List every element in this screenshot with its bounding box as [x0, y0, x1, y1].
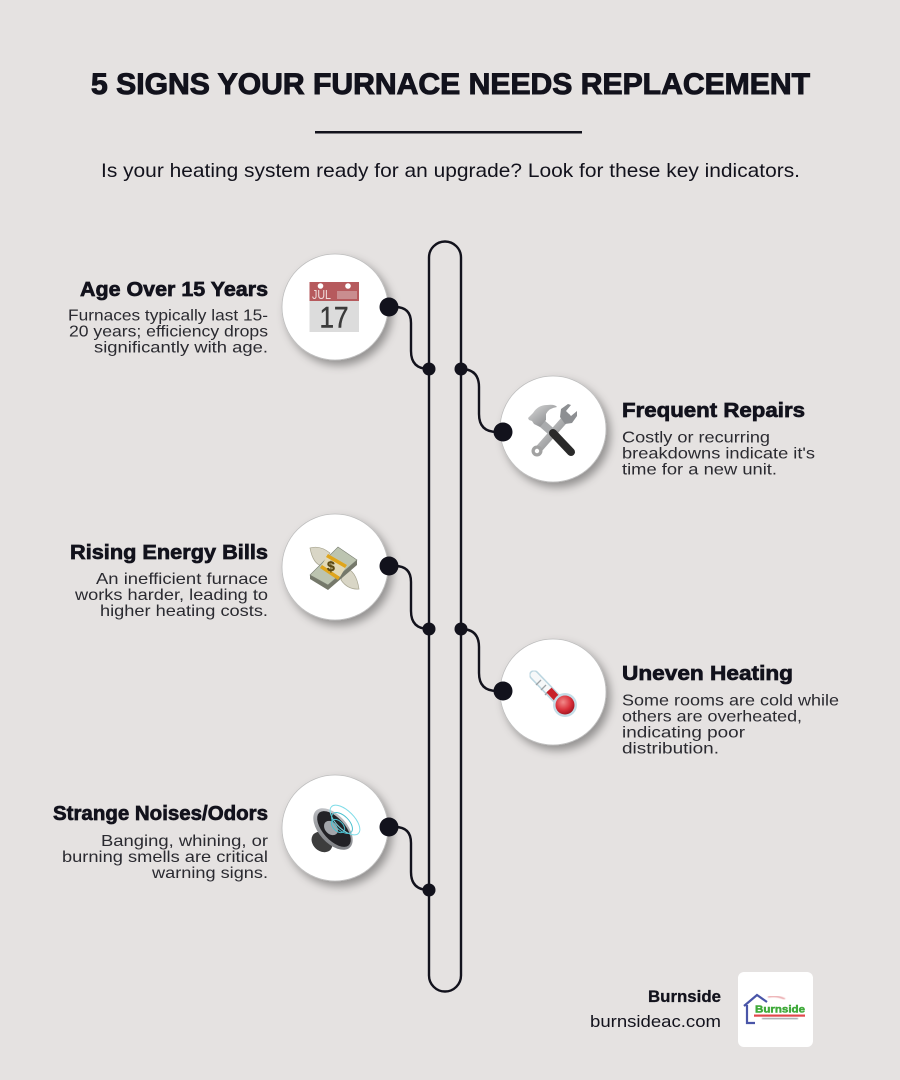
connector dot: noises: [380, 818, 398, 836]
central timeline tube: [429, 242, 461, 992]
heading: bills: Rising Energy Bills: [70, 541, 268, 564]
body: heating: others are overheated,: [622, 708, 802, 726]
icon circle: age: [282, 254, 388, 360]
body: repairs: Costly or recurring: [622, 430, 770, 446]
item: frequent repairs: [494, 376, 815, 482]
icon circle: repairs: [500, 376, 606, 482]
title: 5 SIGNS YOUR FURNACE NEEDS REPLACEMENT: [91, 68, 810, 101]
subtitle: Is your heating system ready for an upgrade? Look for these key indicators.: [101, 160, 800, 182]
body: repairs: time for a new unit.: [622, 462, 777, 478]
body: noises: warning signs.: [151, 865, 268, 882]
connector dot: heating: [494, 682, 512, 700]
body: heating: Some rooms are cold while: [622, 692, 839, 710]
logo wordmark: Burnside: [755, 1004, 805, 1016]
heading: noises: Strange Noises/Odors: [53, 802, 268, 825]
heading: heating: Uneven Heating: [622, 662, 793, 685]
body: repairs: breakdowns indicate it's: [622, 446, 815, 462]
body: noises: [62, 833, 269, 882]
icon: money with wings: [310, 547, 359, 590]
connector: age: [389, 307, 436, 376]
item: rising energy bills: [70, 514, 398, 620]
icon: calendar: [310, 282, 359, 334]
connector: repairs: [454, 362, 503, 432]
icon: calendar: 17: [320, 302, 348, 334]
body: noises: burning smells are critical: [62, 849, 268, 866]
connector dot: bills: [380, 556, 398, 576]
item: uneven heating: [494, 639, 839, 758]
body: bills: works harder, leading to: [74, 587, 268, 604]
body: age: [68, 308, 268, 356]
icon: money with wings: $: [327, 558, 335, 574]
icon: hammer and wrench: [528, 404, 577, 456]
connector dot: age: [380, 298, 398, 316]
icon: calendar: JUL: [312, 288, 331, 302]
connector: bills: [389, 566, 436, 636]
heading: age: Age Over 15 Years: [80, 278, 268, 301]
logo stripe: [754, 1014, 805, 1017]
icon: thermometer: [534, 675, 577, 717]
body: repairs: [622, 430, 815, 478]
connector: heating: [454, 622, 503, 691]
connector dot: repairs: [494, 422, 512, 442]
body: heating: [622, 692, 839, 758]
icon circle: heating: [500, 639, 606, 745]
item: age over 15 years: [68, 254, 398, 360]
footer website: burnsideac.com: [590, 1012, 721, 1031]
body: bills: An inefficient furnace: [96, 571, 268, 588]
logo house: [744, 995, 767, 1023]
connector: noises: [389, 827, 436, 896]
heading: repairs: Frequent Repairs: [622, 399, 805, 422]
body: age: significantly with age.: [94, 340, 268, 356]
icon circle: noises: [282, 775, 388, 881]
title underline: [315, 131, 582, 134]
body: bills: [74, 571, 268, 620]
icon circle: bills: [282, 514, 388, 620]
body: age: 20 years; efficiency drops: [69, 324, 268, 340]
icon: speaker: [306, 800, 365, 857]
footer brand name: Burnside: [648, 988, 721, 1006]
item: strange noises/odors: [53, 775, 398, 882]
logo card: [738, 972, 813, 1047]
body: bills: higher heating costs.: [100, 603, 268, 620]
logo roof swoosh: [768, 996, 785, 999]
body: age: Furnaces typically last 15-: [68, 308, 268, 324]
body: noises: Banging, whining, or: [101, 833, 269, 850]
logo tagline: [762, 1018, 798, 1019]
body: heating: distribution.: [622, 740, 719, 758]
body: heating: indicating poor: [622, 724, 746, 742]
